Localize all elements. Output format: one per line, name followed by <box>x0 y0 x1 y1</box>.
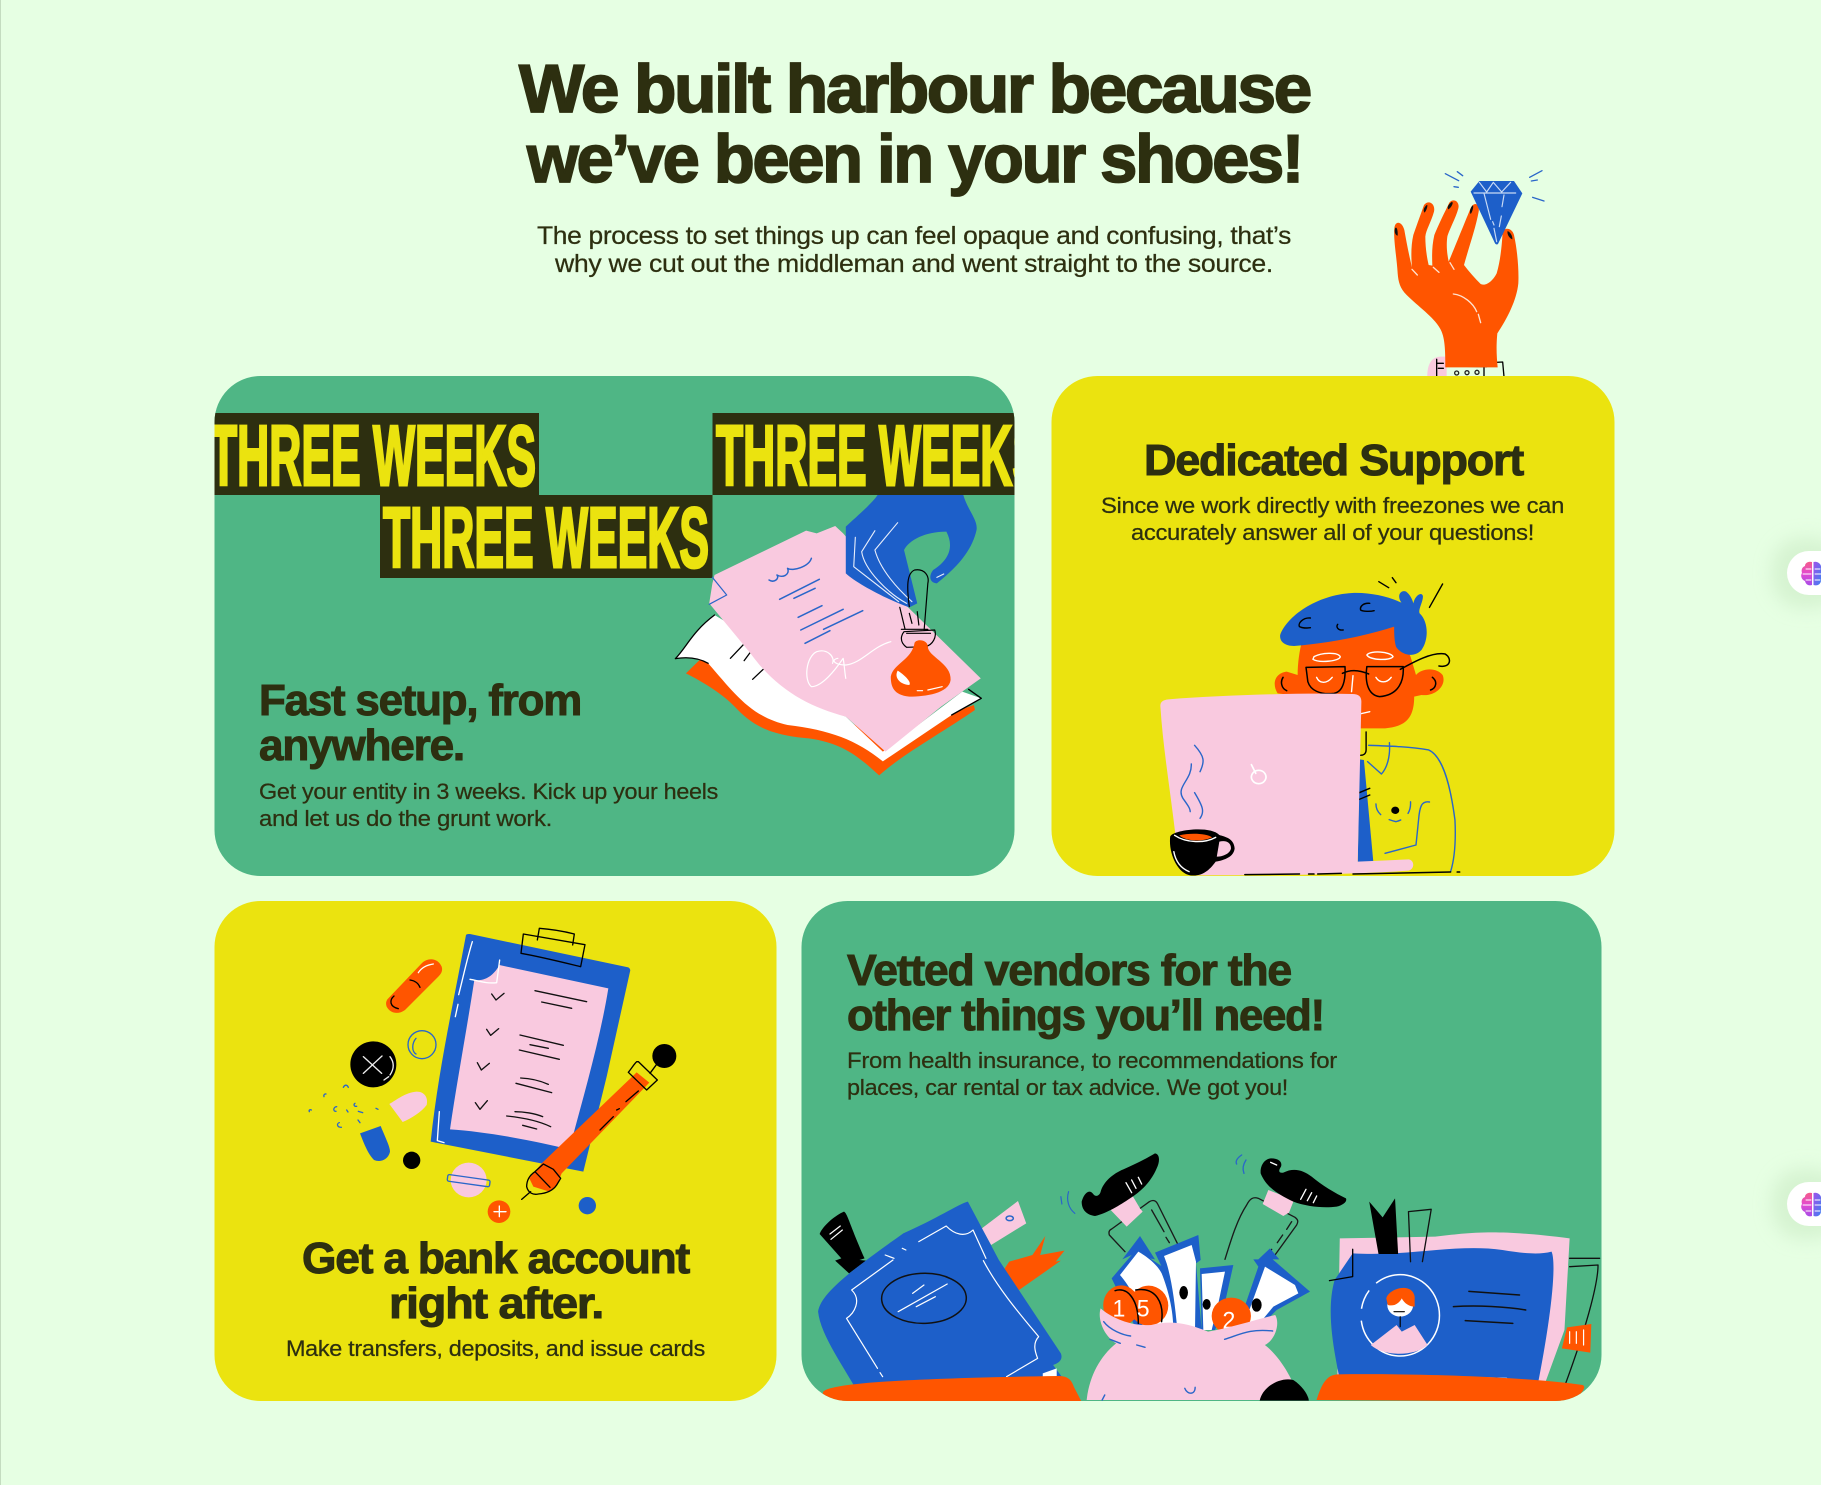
clipboard <box>431 934 630 1172</box>
orange tab <box>1562 1324 1591 1353</box>
banner: three weeks: THREE WEEKS <box>383 491 709 586</box>
brain right lobe <box>1814 562 1821 585</box>
heading: dedicated support: Dedicated Support <box>1144 436 1525 485</box>
coins, bag and id folder <box>821 1198 1600 1402</box>
hand highlights <box>1412 263 1481 323</box>
tie <box>1358 759 1373 863</box>
coins: 5 <box>1137 1295 1150 1322</box>
hand <box>1394 200 1518 367</box>
illustration: man at laptop <box>1160 578 1460 876</box>
banner: three weeks: THREE WEEKS <box>210 409 536 504</box>
bank notes <box>1112 1235 1310 1330</box>
pink tablet <box>447 1163 490 1197</box>
text: fast setup body: and let us do the grunt work. <box>259 806 552 831</box>
pink signed sheet <box>709 526 981 752</box>
book oval <box>878 1271 970 1326</box>
left black object <box>820 1212 866 1273</box>
signature <box>807 642 891 687</box>
shirt <box>1368 743 1455 872</box>
legs, shoes and bank notes <box>1082 1153 1346 1330</box>
coffee steam <box>1181 745 1203 818</box>
powder dots <box>309 1085 378 1127</box>
portrait <box>1361 1275 1439 1356</box>
blue hand <box>846 495 977 607</box>
heading: fast setup <box>259 676 581 770</box>
heading: vetted vendors <box>847 946 1324 1040</box>
laptop logo <box>1251 765 1266 784</box>
beret marks <box>1299 578 1443 630</box>
blue dot <box>579 1197 596 1214</box>
heading: vetted vendors: Vetted vendors for the <box>847 946 1291 995</box>
text: vetted vendors body: places, car rental or tax advice. We got you! <box>847 1075 1288 1100</box>
banner: three weeks <box>214 413 1014 578</box>
eyebrows and eyes <box>1313 652 1393 714</box>
fingernails <box>1395 202 1512 239</box>
text: dedicated support body: Since we work directly with freezones we can <box>1101 493 1564 518</box>
title: We built harbour because <box>519 51 1310 127</box>
subtitle: The process to set things up can feel opaque and confusing, that’s <box>537 222 1291 250</box>
text: vetted vendors body: From health insurance, to recommendations for <box>847 1048 1338 1073</box>
orange burst <box>1001 1236 1064 1293</box>
ink bottle <box>900 570 935 647</box>
heading: fast setup: Fast setup, from <box>259 676 581 725</box>
heading: bank account: Get a bank account <box>302 1234 691 1283</box>
writing lines <box>769 558 863 643</box>
left book group <box>818 1192 1079 1400</box>
info lines <box>1453 1291 1526 1323</box>
pink capsule <box>389 1092 427 1122</box>
coins: 1 <box>1113 1295 1125 1322</box>
orange foreground shapes <box>821 1374 1584 1402</box>
pen <box>522 1044 676 1199</box>
money bag <box>1087 1308 1298 1400</box>
checklist sheet <box>450 965 608 1149</box>
black ball <box>1260 1379 1309 1401</box>
coins <box>1103 1285 1251 1334</box>
orange plus <box>488 1200 510 1223</box>
icon: brain button top <box>1772 538 1821 608</box>
heading: vetted vendors: other things you’ll need! <box>847 991 1324 1040</box>
sleeve cuff <box>1427 357 1504 380</box>
brain left lobe <box>1801 1193 1812 1216</box>
black dot <box>403 1152 420 1169</box>
banner: three weeks: THREE WEEKS <box>716 409 1042 504</box>
coins: 2 <box>1223 1307 1235 1333</box>
illustration: papers and signing hand <box>675 495 981 775</box>
folder clips <box>1369 1198 1398 1254</box>
heading: bank account <box>302 1234 691 1328</box>
panel: dedicated support <box>1051 376 1615 876</box>
text: dedicated support body <box>1101 493 1564 545</box>
orange capsule <box>386 959 442 1013</box>
subtitle: why we cut out the middleman and went straight to the source. <box>554 250 1273 278</box>
illustration: clipboard, pills and pen <box>309 928 676 1223</box>
white middle page <box>675 615 981 761</box>
text: fast setup body: Get your entity in 3 weeks. Kick up your heels <box>259 779 718 804</box>
heading: bank account: right after. <box>389 1279 603 1328</box>
list lines <box>507 991 587 1129</box>
illustration: vendors <box>818 1153 1600 1402</box>
blue book <box>818 1202 1079 1400</box>
glasses <box>1282 654 1449 697</box>
shoes <box>1082 1153 1346 1216</box>
diamond <box>1471 181 1522 244</box>
icon: hand holding diamond <box>1394 171 1544 380</box>
legs <box>1109 1198 1298 1259</box>
laptop <box>1160 694 1413 875</box>
check marks <box>475 993 504 1109</box>
black pill <box>350 1041 396 1087</box>
diamond facets <box>1474 182 1516 242</box>
clip <box>521 928 585 967</box>
socks <box>1111 1190 1294 1227</box>
sparkles <box>1445 171 1544 201</box>
brain right lobe <box>1814 1193 1821 1216</box>
text: vetted vendors body <box>847 1048 1338 1100</box>
text: dedicated support body: accurately answer all of your questions! <box>1131 520 1534 545</box>
panel: bank account <box>214 901 777 1401</box>
title <box>519 51 1310 197</box>
ring <box>408 1031 436 1059</box>
panel: fast setup <box>210 376 1042 876</box>
heading: fast setup: anywhere. <box>259 721 464 770</box>
title: we’ve been in your shoes! <box>526 121 1302 197</box>
blue id folder <box>1329 1198 1600 1393</box>
brain left lobe <box>1801 562 1812 585</box>
subtitle <box>537 222 1291 278</box>
orange back page <box>686 659 975 775</box>
panel: vetted vendors <box>802 901 1602 1402</box>
icon: brain button bottom <box>1772 1169 1821 1239</box>
beret hair <box>1280 591 1427 655</box>
blue capsule <box>360 1126 390 1161</box>
text: bank account body: Make transfers, deposits, and issue cards <box>286 1336 705 1361</box>
coffee cup <box>1170 829 1235 876</box>
text: fast setup body <box>259 779 718 831</box>
tag <box>982 1201 1026 1245</box>
face <box>1275 625 1444 728</box>
